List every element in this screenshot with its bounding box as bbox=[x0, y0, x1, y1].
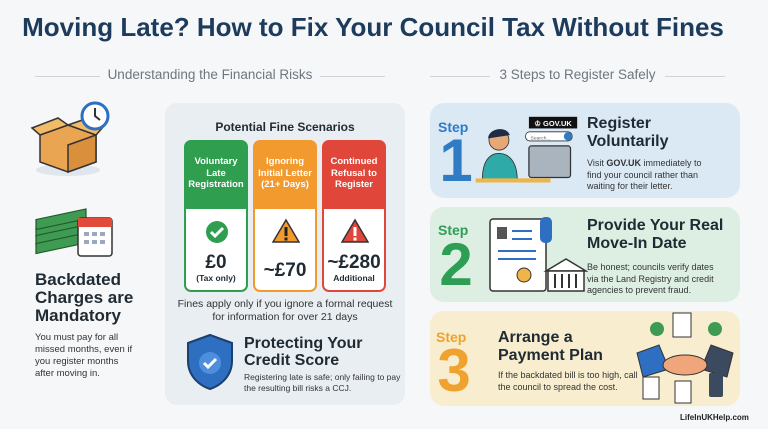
column: voluntary: Voluntary Late Registration bbox=[188, 156, 244, 190]
text: backdated description: You must pay for all missed months, even if you register months after moving in. bbox=[35, 332, 132, 379]
column: refusal: ~£280 bbox=[327, 252, 381, 273]
icon: cash and calendar bbox=[35, 208, 113, 257]
heading: credit score: Protecting Your Credit Score bbox=[244, 335, 363, 369]
column: voluntary: (Tax only) bbox=[196, 273, 236, 283]
icon: shield bbox=[187, 334, 233, 390]
column: refusal: Continued Refusal to Register bbox=[331, 156, 377, 190]
card: step 2: Be honest; councils verify dates via the Land Registry and credit agencies to prevent fraud. bbox=[587, 262, 714, 295]
card: step 1: Voluntarily bbox=[587, 133, 668, 150]
card: step 1: 1 bbox=[439, 127, 473, 194]
card: step 2 bbox=[430, 207, 740, 302]
text: credit score: Registering late is safe; only failing to pay the resulting bill risks a CCJ. bbox=[244, 372, 400, 393]
icon: document with bank bbox=[489, 217, 588, 292]
column: voluntary bbox=[184, 140, 248, 292]
card: step 3: If the backdated bill is too high, call the council to spread the cost. bbox=[498, 370, 638, 392]
card: step 2: Step bbox=[438, 222, 468, 238]
card: step 1: Step bbox=[438, 119, 468, 135]
card: step 3: Step bbox=[436, 329, 466, 345]
heading: backdated charges: Backdated Charges are Mandatory bbox=[35, 270, 133, 325]
card: step 3: Arrange a bbox=[498, 329, 573, 346]
column: ignoring letter: Ignoring Initial Letter (21+ Days) bbox=[258, 156, 312, 190]
card: step 3 bbox=[430, 311, 740, 406]
icon: handshake with documents bbox=[636, 312, 734, 404]
heading: potential fine scenarios: Potential Fine Scenarios bbox=[215, 120, 355, 134]
footer: site credit: LifeInUKHelp.com bbox=[680, 413, 749, 422]
icon: person at computer: Search... bbox=[531, 135, 551, 141]
card: step 3: 3 bbox=[437, 337, 471, 404]
column: voluntary: £0 bbox=[205, 252, 227, 273]
card: step 1: Register bbox=[587, 115, 651, 132]
panel: fine scenarios bbox=[165, 103, 405, 405]
section header: risks: Understanding the Financial Risks bbox=[108, 67, 312, 82]
icon: person at computer: ♔ GOV.UK bbox=[534, 119, 572, 128]
column: refusal bbox=[322, 140, 386, 292]
card: step 3: Payment Plan bbox=[498, 347, 603, 364]
icon: person at computer bbox=[476, 116, 578, 183]
card: step 2: 2 bbox=[439, 231, 473, 298]
icon: box with clock bbox=[30, 102, 110, 176]
column: refusal: Additional bbox=[333, 273, 375, 283]
column: ignoring letter: ~£70 bbox=[264, 260, 306, 281]
section header: steps: 3 Steps to Register Safely bbox=[499, 67, 656, 82]
card: step 2: Move-In Date bbox=[587, 235, 687, 252]
title: Moving Late? How to Fix Your Council Tax Without Fines bbox=[22, 12, 724, 42]
column: ignoring letter bbox=[253, 140, 317, 292]
card: step 1 bbox=[430, 103, 740, 198]
card: step 1: Visit GOV.UK immediately to find your council rather than waiting for their letter. bbox=[587, 158, 702, 191]
text: fines note: Fines apply only if you ignore a formal request for information for over 21 days bbox=[178, 298, 392, 323]
card: step 2: Provide Your Real bbox=[587, 217, 723, 234]
